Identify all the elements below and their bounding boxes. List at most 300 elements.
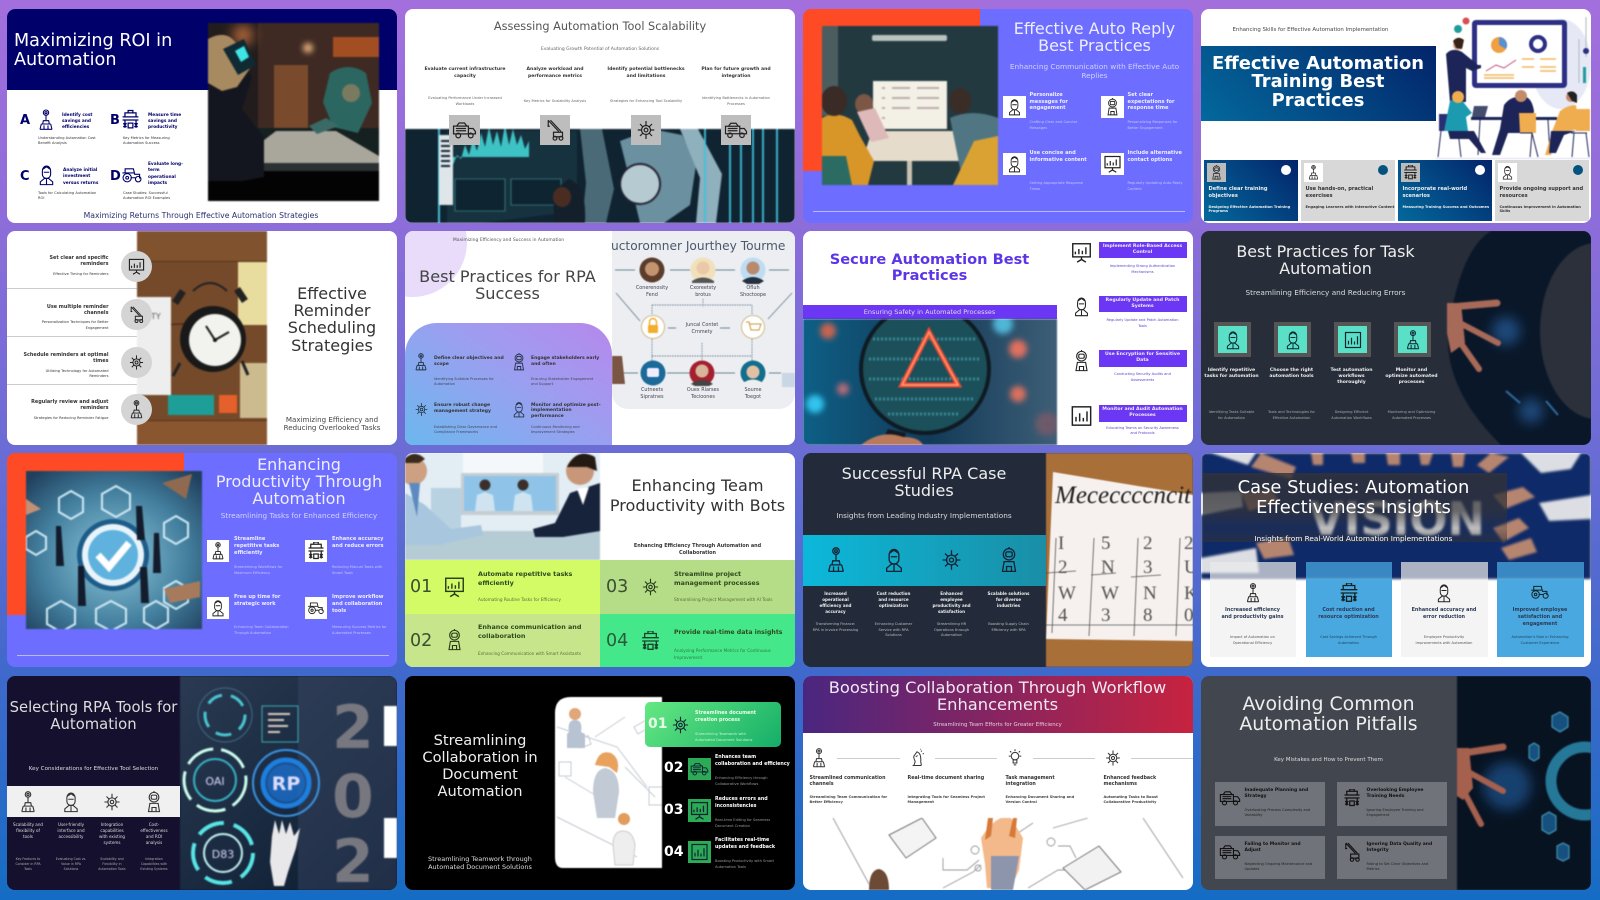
item text: engagement bbox=[1030, 105, 1066, 111]
subtitle: Key Mistakes and How to Prevent Them bbox=[1274, 756, 1383, 762]
arrow button bbox=[1378, 165, 1388, 175]
case text: Cost reduction bbox=[877, 590, 910, 596]
node label bbox=[627, 285, 677, 299]
row text: reminders bbox=[80, 261, 108, 267]
step text bbox=[1262, 368, 1322, 380]
factor text: accessibility bbox=[58, 834, 83, 839]
case text: optimization bbox=[879, 603, 908, 608]
pitfall text bbox=[1244, 788, 1308, 800]
row text: Use multiple reminder bbox=[47, 304, 108, 310]
item text: Define clear objectives and bbox=[434, 356, 504, 360]
node label bbox=[728, 285, 778, 299]
item caption: Case Studies: Successful bbox=[123, 190, 168, 194]
column heading bbox=[607, 66, 685, 78]
pitfall text: Inadequate Planning and bbox=[1244, 788, 1308, 793]
panel: tool scalability bbox=[405, 9, 795, 223]
item text bbox=[332, 536, 384, 550]
item text bbox=[434, 403, 491, 416]
row text: Regularly review and adjust bbox=[31, 398, 108, 404]
caption: Reminders bbox=[89, 374, 108, 378]
card text: exercises bbox=[1306, 193, 1332, 199]
caption: Automation Tools bbox=[715, 865, 746, 869]
title: Productivity Through bbox=[216, 472, 382, 491]
factor text: flexibility of bbox=[16, 828, 40, 833]
caption bbox=[1244, 808, 1310, 819]
item text: strategic work bbox=[234, 601, 276, 607]
feature text: channels bbox=[810, 782, 834, 787]
item text: informative content bbox=[1030, 157, 1087, 163]
row text bbox=[17, 352, 108, 365]
step text: optimize automated bbox=[1385, 374, 1438, 379]
icon bbox=[414, 353, 428, 371]
item text bbox=[234, 594, 280, 608]
item text bbox=[332, 594, 384, 616]
icon: dump truck bbox=[449, 115, 480, 145]
caption: Crafting Clear and Concise bbox=[1030, 120, 1078, 124]
photo: robot hand touching RPA dial bbox=[180, 676, 397, 890]
number: 01 bbox=[410, 577, 432, 597]
caption: Effective Timing for Reminders bbox=[53, 272, 108, 276]
item caption: ROI bbox=[38, 196, 44, 200]
caption: Tools and Technologies for bbox=[1268, 410, 1315, 414]
caption bbox=[810, 795, 887, 806]
icon bbox=[1340, 789, 1362, 807]
caption: Streamlining HR bbox=[937, 622, 966, 626]
subtitle: Insights from Leading Industry Implementations bbox=[836, 511, 1012, 520]
item text: Identify cost bbox=[62, 112, 92, 118]
caption: Impact of Automation on bbox=[1230, 634, 1275, 638]
icon bbox=[810, 748, 828, 768]
subtitle: Collaboration bbox=[679, 550, 716, 556]
icon tile bbox=[688, 758, 711, 780]
card text: error reduction bbox=[1423, 614, 1465, 620]
title: Automation bbox=[438, 783, 522, 800]
photo: robot hand touching RPA dial: D83 bbox=[212, 848, 234, 861]
icon: robot bbox=[18, 791, 38, 813]
node label: Soume bbox=[744, 387, 761, 393]
panel: reminder scheduling bbox=[7, 231, 397, 445]
item text: investment bbox=[63, 174, 90, 179]
factor text: with existing bbox=[99, 834, 125, 839]
subtitle: Streamlining Teamwork through bbox=[428, 855, 532, 863]
caption: Ensuring Stakeholder Engagement bbox=[531, 377, 593, 381]
photo: robot hand touching RPA dial: OAI bbox=[205, 775, 225, 788]
case text: efficiency and bbox=[820, 603, 852, 608]
caption: Compliance Frameworks bbox=[434, 430, 478, 434]
subtitle bbox=[267, 416, 397, 433]
feature text: mechanisms bbox=[1104, 782, 1137, 787]
case text bbox=[864, 590, 922, 609]
item: expectations bbox=[1101, 92, 1178, 130]
number: 03 bbox=[606, 577, 628, 597]
step text: Monitor and bbox=[1396, 368, 1427, 372]
card text bbox=[1208, 186, 1268, 200]
tool factor 3 bbox=[91, 821, 133, 874]
photo: handwritten paper on wood: 5 bbox=[1100, 533, 1110, 554]
card 1 bbox=[1204, 160, 1298, 221]
feature 2 bbox=[908, 748, 1000, 808]
icon: helmet robot bbox=[144, 791, 164, 813]
caption bbox=[695, 731, 752, 743]
caption: Times bbox=[1030, 187, 1040, 191]
center node label: Crnmety bbox=[691, 329, 713, 335]
card text: Use hands-on, practical bbox=[1306, 186, 1373, 192]
title: Enhancing Team bbox=[631, 476, 764, 495]
icon: gear bbox=[631, 115, 661, 145]
teal icon band bbox=[802, 535, 1046, 586]
title: Best Practices for RPA bbox=[419, 266, 596, 286]
panel: auto reply bbox=[802, 9, 1192, 223]
caption: Updates bbox=[1244, 867, 1259, 871]
photo: alarm clock on wood desk: TY bbox=[150, 312, 161, 321]
caption: Enhancing Communication with Smart Assistants bbox=[478, 651, 581, 656]
card text: objectives bbox=[1208, 193, 1238, 199]
item text: Streamline bbox=[234, 536, 265, 542]
photo: robot hand touching RPA dial: 2 bbox=[332, 693, 374, 763]
node label: Cxoreetsty bbox=[690, 285, 716, 291]
photo: hands around table with VISION: VISION bbox=[1308, 492, 1484, 546]
column heading: Plan for future growth and bbox=[701, 67, 771, 72]
item caption: Automation Success bbox=[123, 141, 160, 145]
caption: Analyzing Performance Metrics for Continuous bbox=[674, 648, 771, 653]
column heading: integration bbox=[721, 74, 750, 78]
factor text: systems bbox=[104, 840, 120, 845]
step 4 bbox=[1382, 322, 1442, 422]
item text: efficiencies bbox=[62, 125, 89, 130]
text: collaboration bbox=[478, 632, 526, 640]
tool factor 1 bbox=[7, 821, 49, 874]
item text bbox=[531, 356, 599, 368]
caption: Ignoring Employee Training and bbox=[1366, 808, 1424, 812]
icon tile bbox=[1304, 162, 1323, 182]
item: workflow tools bbox=[305, 594, 397, 636]
panel: training best practices bbox=[1200, 9, 1590, 223]
node label: Sipratnes bbox=[640, 394, 664, 400]
node label: Ouex Rlarses bbox=[687, 387, 719, 393]
item text bbox=[148, 162, 183, 186]
caption bbox=[1244, 862, 1312, 873]
caption: Cost Savings Achieved Through bbox=[1320, 634, 1377, 638]
photo: handwritten paper on wood: 4 bbox=[1058, 605, 1068, 626]
item B bbox=[110, 110, 181, 145]
case 3 bbox=[922, 590, 980, 636]
panel: maximizing ROI bbox=[7, 9, 397, 223]
caption: Streamlining Team Communication for bbox=[810, 795, 887, 799]
caption bbox=[434, 377, 494, 388]
title: Best Practices bbox=[1038, 36, 1151, 55]
item text: performance bbox=[531, 414, 564, 419]
item text: savings and bbox=[148, 119, 177, 124]
caption bbox=[715, 817, 770, 829]
caption: for Automation bbox=[1218, 416, 1245, 420]
step text: creation process bbox=[695, 718, 740, 722]
item: update and patch bbox=[1070, 296, 1186, 329]
title: Maximizing ROI in bbox=[14, 31, 172, 51]
step text: Enhances team bbox=[715, 755, 756, 760]
text bbox=[478, 570, 572, 588]
card 3 bbox=[1398, 160, 1492, 221]
item text: and collaboration bbox=[332, 601, 382, 607]
card text: resource optimization bbox=[1318, 614, 1379, 620]
panel: document collaboration bbox=[405, 676, 795, 890]
item text bbox=[1128, 150, 1182, 164]
pitfall card 2 bbox=[1336, 782, 1446, 826]
item caption: Automation ROI Examples bbox=[123, 196, 170, 200]
title: Practices bbox=[892, 267, 967, 284]
caption bbox=[1098, 264, 1186, 275]
caption bbox=[17, 320, 108, 331]
photo: handwritten paper on wood: 8 bbox=[1142, 605, 1152, 626]
item A bbox=[20, 110, 96, 145]
card text: scenarios bbox=[1402, 193, 1430, 199]
item caption bbox=[123, 136, 170, 145]
caption: Employee Productivity bbox=[1424, 634, 1464, 638]
item caption: Understanding Automation Cost bbox=[38, 136, 96, 140]
heading band bbox=[7, 9, 397, 90]
pitfall text bbox=[1366, 788, 1423, 800]
caption: Failing to Set Clear Objectives and bbox=[1366, 862, 1428, 866]
icon: robot 1 bbox=[824, 547, 846, 573]
subtitle bbox=[1010, 62, 1179, 80]
caption: Assessments bbox=[1131, 378, 1154, 382]
icon bbox=[207, 540, 229, 562]
item text: and often bbox=[531, 362, 556, 367]
icon bbox=[444, 576, 465, 598]
icon bbox=[512, 353, 526, 371]
caption: Streamlining Teamwork with bbox=[695, 732, 746, 736]
title: Practices bbox=[1272, 90, 1364, 111]
factor text bbox=[7, 822, 49, 840]
item text: messages for bbox=[1030, 99, 1068, 105]
subtitle: Enhancing Communication with Effective Auto bbox=[1010, 62, 1179, 70]
item banner: Data bbox=[1136, 358, 1149, 363]
caption: RPA in Invoice Processing bbox=[813, 628, 858, 632]
title bbox=[1200, 694, 1456, 734]
photo band: analytics and robot bbox=[405, 128, 795, 223]
item banner: Control bbox=[1133, 250, 1152, 255]
illustration: workflow sketch with people bbox=[555, 697, 662, 868]
factor text: User-friendly bbox=[58, 822, 84, 827]
panel: RPA case studies bbox=[802, 453, 1192, 667]
eyebrow subtitle: Maximizing Efficiency and Success in Automation bbox=[453, 238, 564, 243]
caption: Enhancing Document Sharing and bbox=[1006, 795, 1074, 799]
caption: Collaborative Productivity bbox=[1104, 800, 1156, 804]
step text: collaboration and efficiency bbox=[715, 762, 790, 767]
illustration: team at whiteboard bbox=[1436, 9, 1590, 159]
icon bbox=[1006, 748, 1024, 768]
title: Enhancing bbox=[257, 454, 341, 474]
item banner: Monitor and Audit Automation bbox=[1102, 407, 1183, 412]
title bbox=[1200, 478, 1506, 519]
pitfall text: Failing to Monitor and bbox=[1244, 842, 1301, 847]
item text: implementation bbox=[531, 408, 572, 413]
panel: enhancing productivity bbox=[7, 453, 397, 667]
icon bbox=[305, 597, 327, 619]
item: alternative contact bbox=[1100, 150, 1192, 192]
caption: Engagement bbox=[1366, 813, 1389, 817]
footer subtitle: Maximizing Returns Through Effective Automation Strategies bbox=[84, 211, 318, 220]
caption bbox=[1030, 120, 1078, 130]
caption: Boosting Productivity with Smart bbox=[715, 859, 774, 863]
caption bbox=[1306, 634, 1392, 646]
caption: Service with RPA bbox=[878, 628, 909, 632]
caption: Personalizing Responses for bbox=[1128, 120, 1178, 124]
photo: hand and digital icons bbox=[1456, 676, 1590, 890]
caption bbox=[922, 622, 980, 639]
caption: Engagement bbox=[86, 326, 108, 330]
caption: Better Efficiency bbox=[810, 800, 843, 804]
photo: handwritten paper on wood: 3 bbox=[1142, 557, 1152, 578]
item D bbox=[110, 162, 183, 200]
column heading bbox=[701, 66, 771, 78]
reminder row 3 bbox=[17, 347, 151, 378]
case text: employee bbox=[940, 597, 963, 602]
photo: handwritten paper on wood: 2 bbox=[1142, 533, 1152, 554]
column 2 bbox=[524, 66, 586, 145]
node label: Fend bbox=[646, 292, 658, 298]
title: Collaboration in bbox=[422, 749, 538, 766]
card 2 bbox=[1306, 562, 1392, 657]
caption: Operations through bbox=[934, 628, 969, 632]
title: Automation Pitfalls bbox=[1239, 713, 1418, 735]
caption bbox=[1262, 409, 1322, 421]
icon bbox=[1218, 789, 1240, 807]
item text: versus returns bbox=[63, 181, 98, 186]
subtitle band: Ensuring Safety in Automated Processes bbox=[864, 308, 995, 316]
caption: Establishing Clear Governance and bbox=[434, 424, 497, 428]
card text: and productivity gains bbox=[1221, 614, 1284, 620]
photo: handwritten paper on wood: 2 bbox=[1058, 557, 1067, 578]
caption: Strategies for Enhancing Tool Scalability bbox=[610, 99, 682, 103]
item text: operational bbox=[148, 175, 176, 180]
photo: checkmark gear and circuitry bbox=[26, 471, 202, 629]
step text: Facilitates real-time bbox=[715, 838, 769, 843]
caption: Customer Experience bbox=[1521, 641, 1559, 645]
step 2 bbox=[1262, 322, 1322, 422]
factor text: analysis bbox=[146, 840, 162, 845]
item banner: Regularly Update and Patch bbox=[1106, 298, 1179, 303]
icon bbox=[1104, 748, 1122, 768]
panel: automation pitfalls bbox=[1200, 676, 1590, 890]
caption: Overlooking Process Complexity and bbox=[1244, 808, 1310, 812]
item text: impacts bbox=[148, 181, 167, 186]
item text bbox=[148, 112, 181, 130]
diagram heading: uctoromner Jourthey Tourme bbox=[612, 238, 785, 252]
item: monitor and audit bbox=[1070, 405, 1186, 438]
caption: Engaging Learners with Interactive Content bbox=[1306, 205, 1394, 209]
caption bbox=[531, 377, 593, 388]
caption bbox=[1496, 634, 1584, 646]
item text: management strategy bbox=[434, 409, 491, 414]
pitfall text: Training Needs bbox=[1366, 794, 1404, 799]
arrow button bbox=[1573, 165, 1583, 175]
item text bbox=[531, 402, 601, 420]
icon: team robot bbox=[61, 791, 81, 813]
tool factor 4 bbox=[133, 821, 175, 874]
item C bbox=[20, 166, 98, 200]
icon bbox=[1002, 153, 1026, 175]
white icon band bbox=[7, 786, 180, 817]
node label: Tecioones bbox=[691, 394, 715, 400]
caption bbox=[715, 775, 768, 787]
quadrant 03 bbox=[600, 560, 795, 614]
caption bbox=[1500, 205, 1581, 214]
column heading bbox=[424, 66, 506, 78]
caption: Key Features to bbox=[16, 857, 40, 861]
step text: automation tools bbox=[1269, 374, 1314, 379]
caption: Utilizing Technology for Automated bbox=[46, 368, 108, 372]
step text bbox=[695, 710, 756, 724]
node label: Toegot bbox=[745, 394, 761, 400]
caption: Regularly Update and Patch Automation bbox=[1106, 318, 1179, 322]
item text: and reduce errors bbox=[332, 543, 384, 549]
text: management processes bbox=[674, 578, 760, 586]
item text: repetitive tasks bbox=[234, 543, 279, 549]
orange accent block bbox=[7, 453, 184, 615]
caption: Automating Routine Tasks for Efficiency bbox=[478, 597, 561, 602]
item text: Set clear bbox=[1128, 92, 1153, 98]
card 1 bbox=[1210, 562, 1296, 657]
factor text bbox=[133, 822, 175, 846]
caption: Scalability and bbox=[100, 857, 124, 861]
card text: Cost reduction and bbox=[1322, 607, 1375, 613]
title: Automation bbox=[252, 489, 346, 508]
feature text: Streamlined communication bbox=[810, 776, 886, 780]
feature text: Task management bbox=[1006, 776, 1055, 780]
node label bbox=[678, 285, 728, 299]
icon bbox=[1070, 350, 1092, 372]
title bbox=[802, 252, 1056, 283]
center node label: Juncal Contet bbox=[686, 322, 718, 328]
icon bbox=[512, 401, 526, 418]
reminder row 1 bbox=[17, 251, 151, 282]
case text: Enhanced bbox=[940, 590, 963, 596]
icon bbox=[1100, 96, 1124, 118]
center node label bbox=[672, 322, 732, 336]
caption: Mechanisms bbox=[1131, 270, 1154, 274]
caption: Automation Tools bbox=[98, 867, 126, 871]
step text bbox=[715, 796, 768, 810]
number: 02 bbox=[410, 631, 432, 651]
icon: pin bbox=[40, 110, 52, 130]
row text bbox=[17, 254, 108, 268]
item text: contact options bbox=[1128, 157, 1172, 163]
photo: handwritten paper on wood: W bbox=[1100, 583, 1118, 604]
caption bbox=[234, 625, 289, 636]
item text: savings and bbox=[62, 119, 91, 124]
text bbox=[478, 622, 581, 640]
step text: Streamlines document bbox=[695, 710, 756, 716]
node label: Cutneets bbox=[641, 387, 663, 393]
photo: meeting room bbox=[821, 25, 999, 186]
column heading: and limitations bbox=[626, 74, 666, 78]
icon: atom gear bbox=[102, 791, 122, 813]
caption: Regularly Updating Auto Reply bbox=[1128, 181, 1182, 185]
case text: accuracy bbox=[825, 609, 846, 614]
caption: Transforming Finance: bbox=[816, 622, 855, 626]
subtitle: Evaluating Growth Potential of Automation Solutions bbox=[541, 47, 659, 52]
pitfall text: Integrity bbox=[1366, 848, 1389, 853]
caption: Enhancing Customer bbox=[875, 622, 912, 626]
caption: Consider in RPA bbox=[15, 862, 41, 866]
caption: Integrating Tools for Seamless Project bbox=[908, 795, 985, 799]
caption: and Support bbox=[531, 382, 553, 386]
subtitle: Reducing Overlooked Tasks bbox=[284, 423, 380, 432]
title bbox=[267, 284, 397, 354]
step text bbox=[715, 837, 775, 851]
item text: Ensure robust change bbox=[434, 403, 490, 408]
text: Streamline project bbox=[674, 570, 741, 578]
